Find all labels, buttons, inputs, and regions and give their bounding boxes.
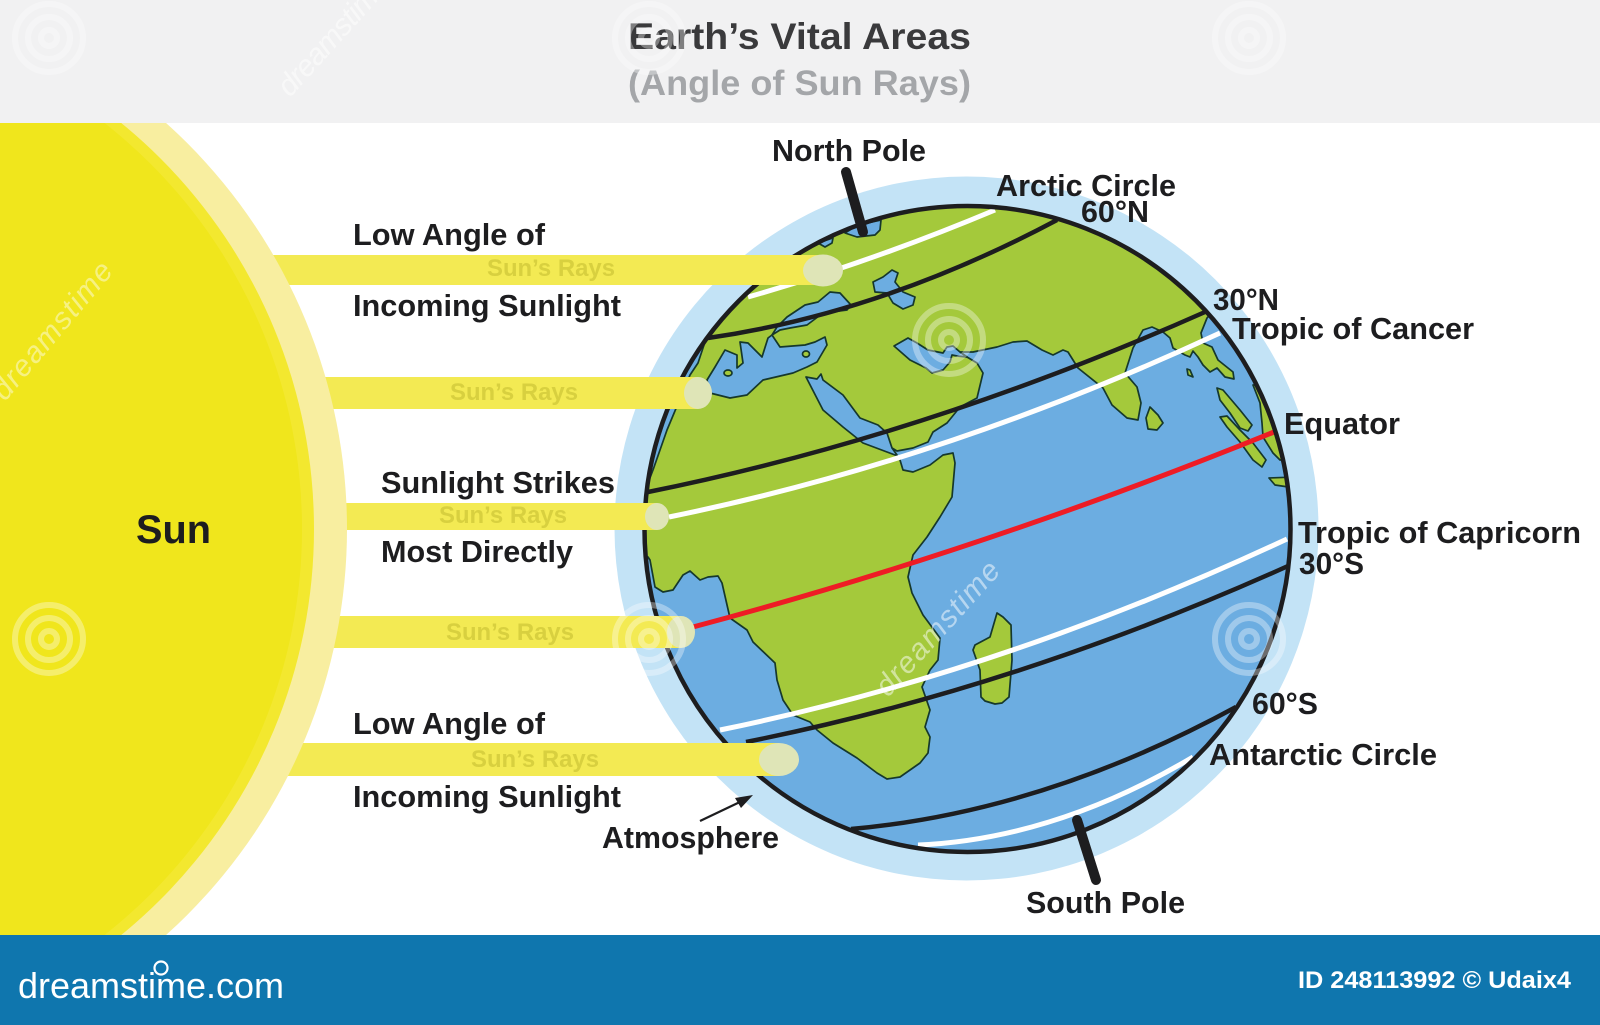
footer band	[0, 935, 1600, 1025]
island: small eastern land	[1268, 476, 1286, 488]
water: Persian Gulf	[894, 338, 967, 373]
label: Arctic Circle: Arctic Circle	[996, 168, 1176, 203]
label: 30°S: 30°S	[1299, 546, 1364, 581]
sun ray 3: Sun’s Rays	[439, 502, 567, 529]
water: Mediterranean	[707, 335, 827, 398]
island: Mediterranean isle west	[724, 370, 732, 376]
label: Most Directly: Most Directly	[381, 534, 574, 569]
label: Atmosphere: Atmosphere	[602, 820, 779, 855]
black latitude line: 60°N	[708, 220, 1057, 338]
atmosphere	[614, 176, 1318, 880]
sun ray 5	[200, 743, 799, 776]
water: western sliver	[650, 344, 706, 478]
red latitude line: Equator	[693, 432, 1274, 627]
sun label: Sun	[136, 508, 211, 552]
island: tiny Bay of Bengal isle	[1187, 369, 1193, 377]
title: Earth’s Vital Areas	[628, 16, 971, 57]
black latitude line: 30°N	[648, 312, 1205, 492]
label: Low Angle of (top): Low Angle of	[353, 217, 546, 252]
label: North Pole: North Pole	[772, 133, 926, 168]
white latitude line: Antarctic Circle	[918, 757, 1193, 845]
arrow: atmosphere pointer	[700, 795, 753, 821]
watermark	[0, 0, 1283, 703]
label: Antarctic Circle: Antarctic Circle	[1209, 737, 1437, 772]
watermark: dreamstime	[869, 554, 1007, 703]
header band	[0, 0, 1600, 123]
white latitude line: Tropic of Capricorn	[720, 539, 1287, 730]
water: arctic bay	[845, 220, 881, 237]
island: eastern land	[1252, 384, 1281, 461]
island: Sri Lanka	[1146, 407, 1163, 430]
black latitude line: 30°S	[746, 566, 1288, 742]
sun ray 1	[200, 254, 843, 286]
white latitude line: Arctic Circle	[748, 210, 995, 297]
sun ray 2	[200, 377, 712, 409]
island: Sumatra	[1217, 388, 1252, 431]
sun ray 5: Sun’s Rays	[471, 746, 599, 773]
land: Africa and Eurasia	[646, 208, 1235, 780]
footer logo: dreamstime.com	[18, 965, 284, 1006]
water: northern gulf	[873, 270, 915, 309]
footer image id: ID 248113992 © Udaix4	[1298, 967, 1572, 994]
label: Sunlight Strikes: Sunlight Strikes	[381, 465, 615, 500]
label: Incoming Sunlight (bottom): Incoming Sunlight	[353, 779, 621, 814]
water: small arctic bay	[818, 238, 833, 247]
white latitude line: Tropic of Cancer	[669, 333, 1220, 517]
island: Madagascar	[973, 613, 1012, 704]
sun ray 4: Sun’s Rays	[446, 619, 574, 646]
label: Tropic of Capricorn: Tropic of Capricorn	[1298, 515, 1581, 550]
label: Incoming Sunlight (top): Incoming Sunlight	[353, 288, 621, 323]
globe outline	[644, 206, 1290, 852]
black latitude line: 60°S	[851, 707, 1236, 829]
label: 30°N: 30°N	[1213, 282, 1279, 317]
sun ray 3	[200, 502, 669, 530]
label: South Pole: South Pole	[1026, 885, 1185, 920]
subtitle: (Angle of Sun Rays)	[628, 64, 971, 103]
label: Tropic of Cancer: Tropic of Cancer	[1232, 311, 1474, 346]
label: Low Angle of (bottom): Low Angle of	[353, 706, 546, 741]
sun ray 1: Sun’s Rays	[487, 255, 615, 282]
sun ray 4	[200, 616, 695, 648]
water: northern inland sea	[772, 292, 851, 335]
earth globe	[642, 204, 1293, 854]
label: 60°N: 60°N	[1081, 194, 1149, 229]
south pole axis	[1077, 820, 1096, 880]
island: Mediterranean isle east	[802, 351, 810, 357]
label: Equator: Equator	[1284, 406, 1400, 441]
island: Java	[1220, 416, 1266, 467]
sun ray 2: Sun’s Rays	[450, 379, 578, 406]
water: Red Sea	[806, 374, 897, 455]
north pole axis	[846, 172, 863, 232]
label: 60°S: 60°S	[1252, 686, 1318, 721]
